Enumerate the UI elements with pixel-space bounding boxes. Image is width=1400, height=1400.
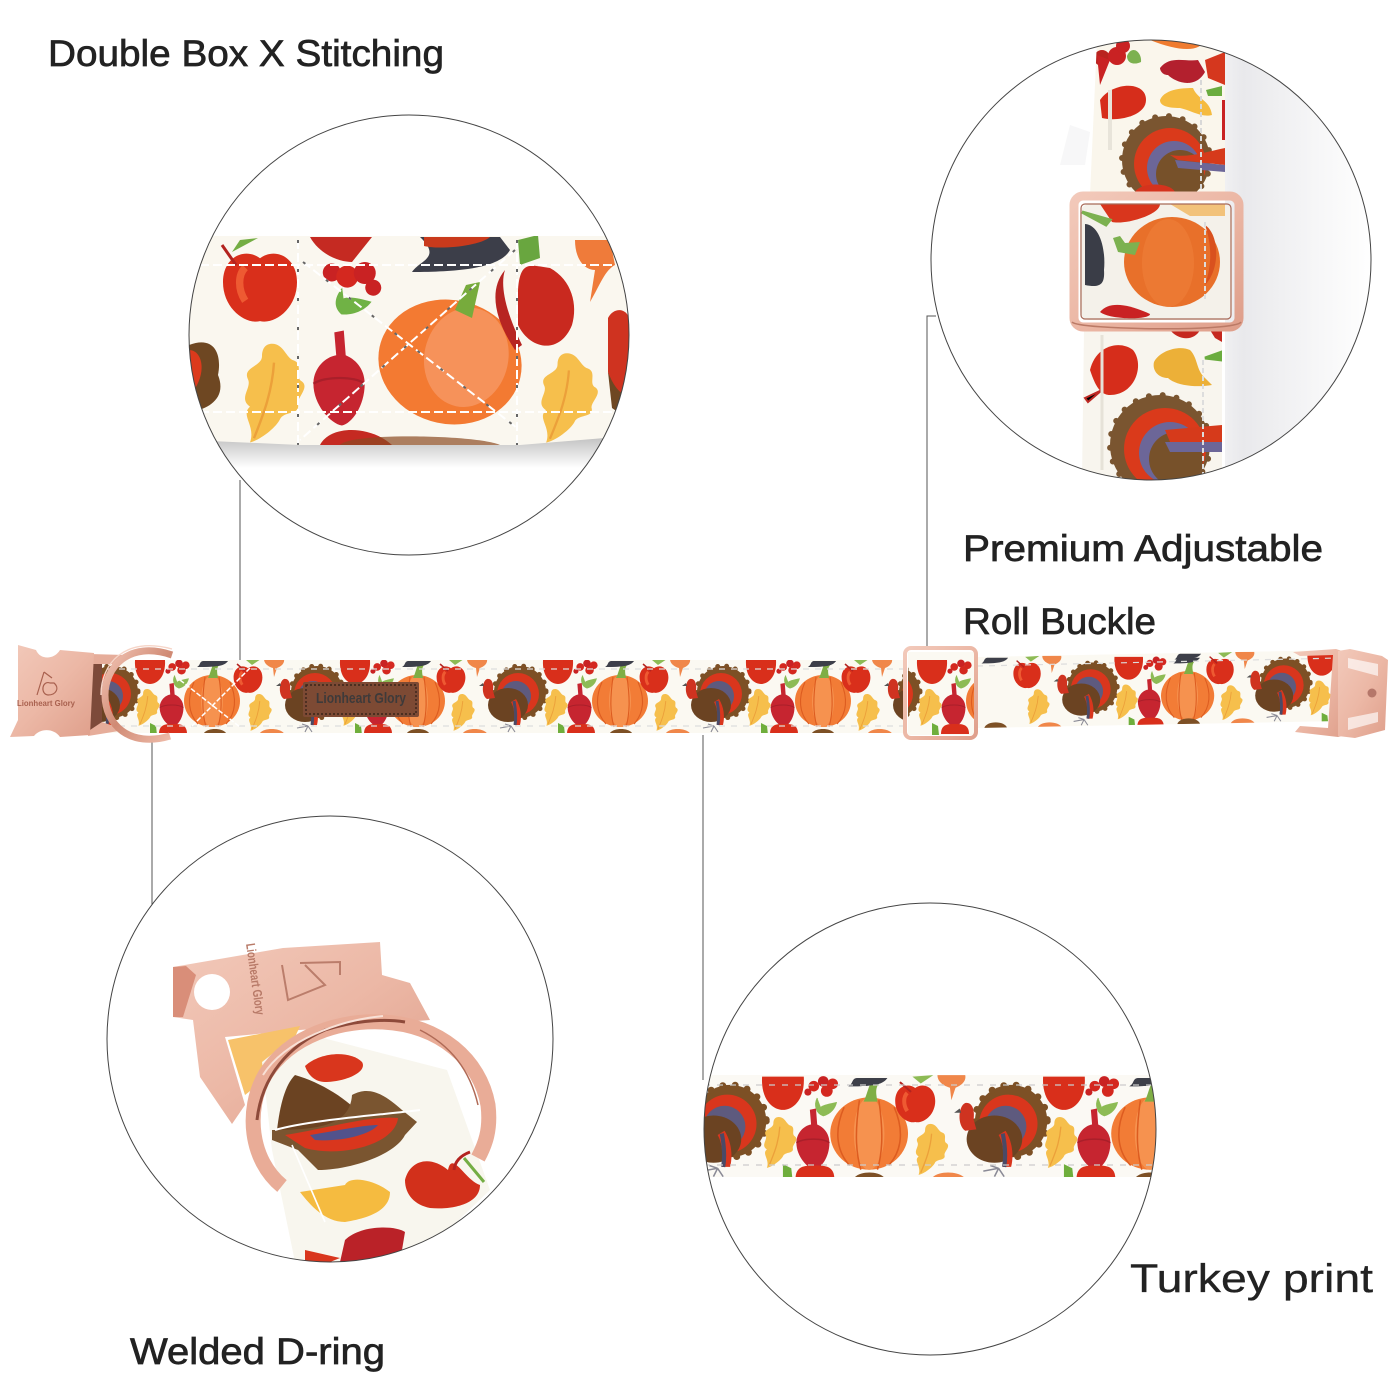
heading: premium adjustable roll buckle: Roll Buckle: [963, 601, 1156, 642]
heading: welded d-ring: Welded D-ring: [130, 1331, 385, 1372]
left release buckle: Lionheart Glory: [17, 698, 75, 708]
fabric inside buckle: [228, 1026, 300, 1095]
collar band: right section: [978, 650, 1333, 728]
heading: turkey print: Turkey print: [1130, 1257, 1373, 1301]
collar band: left section: [102, 660, 903, 733]
d-ring: [253, 1016, 489, 1186]
metal buckle: [173, 942, 430, 1124]
title: double box x stitching: Double Box X Stitching: [48, 33, 444, 74]
leather brand patch: [303, 682, 419, 717]
d-ring: [101, 646, 172, 739]
metal buckle: Lionheart Glory: [243, 942, 268, 1016]
heading: premium adjustable roll buckle: Premium Adjustable: [963, 528, 1323, 569]
right release buckle: [1293, 649, 1388, 738]
collar band: strap inside slide buckle: [908, 652, 974, 735]
connector lines: [152, 316, 936, 1080]
circle: stitching detail: [189, 115, 630, 555]
slide buckle: [905, 648, 976, 738]
circle: welded d-ring detail: [107, 816, 553, 1265]
left release buckle: [10, 645, 125, 737]
circle: turkey print detail: [704, 902, 1156, 1356]
fabric strap: [262, 1032, 490, 1262]
leather brand patch: Lionheart Glory: [316, 690, 407, 707]
circle: roll buckle detail: [931, 39, 1375, 495]
collar: [0, 645, 1400, 739]
heading: premium adjustable roll buckle: [963, 528, 1323, 642]
